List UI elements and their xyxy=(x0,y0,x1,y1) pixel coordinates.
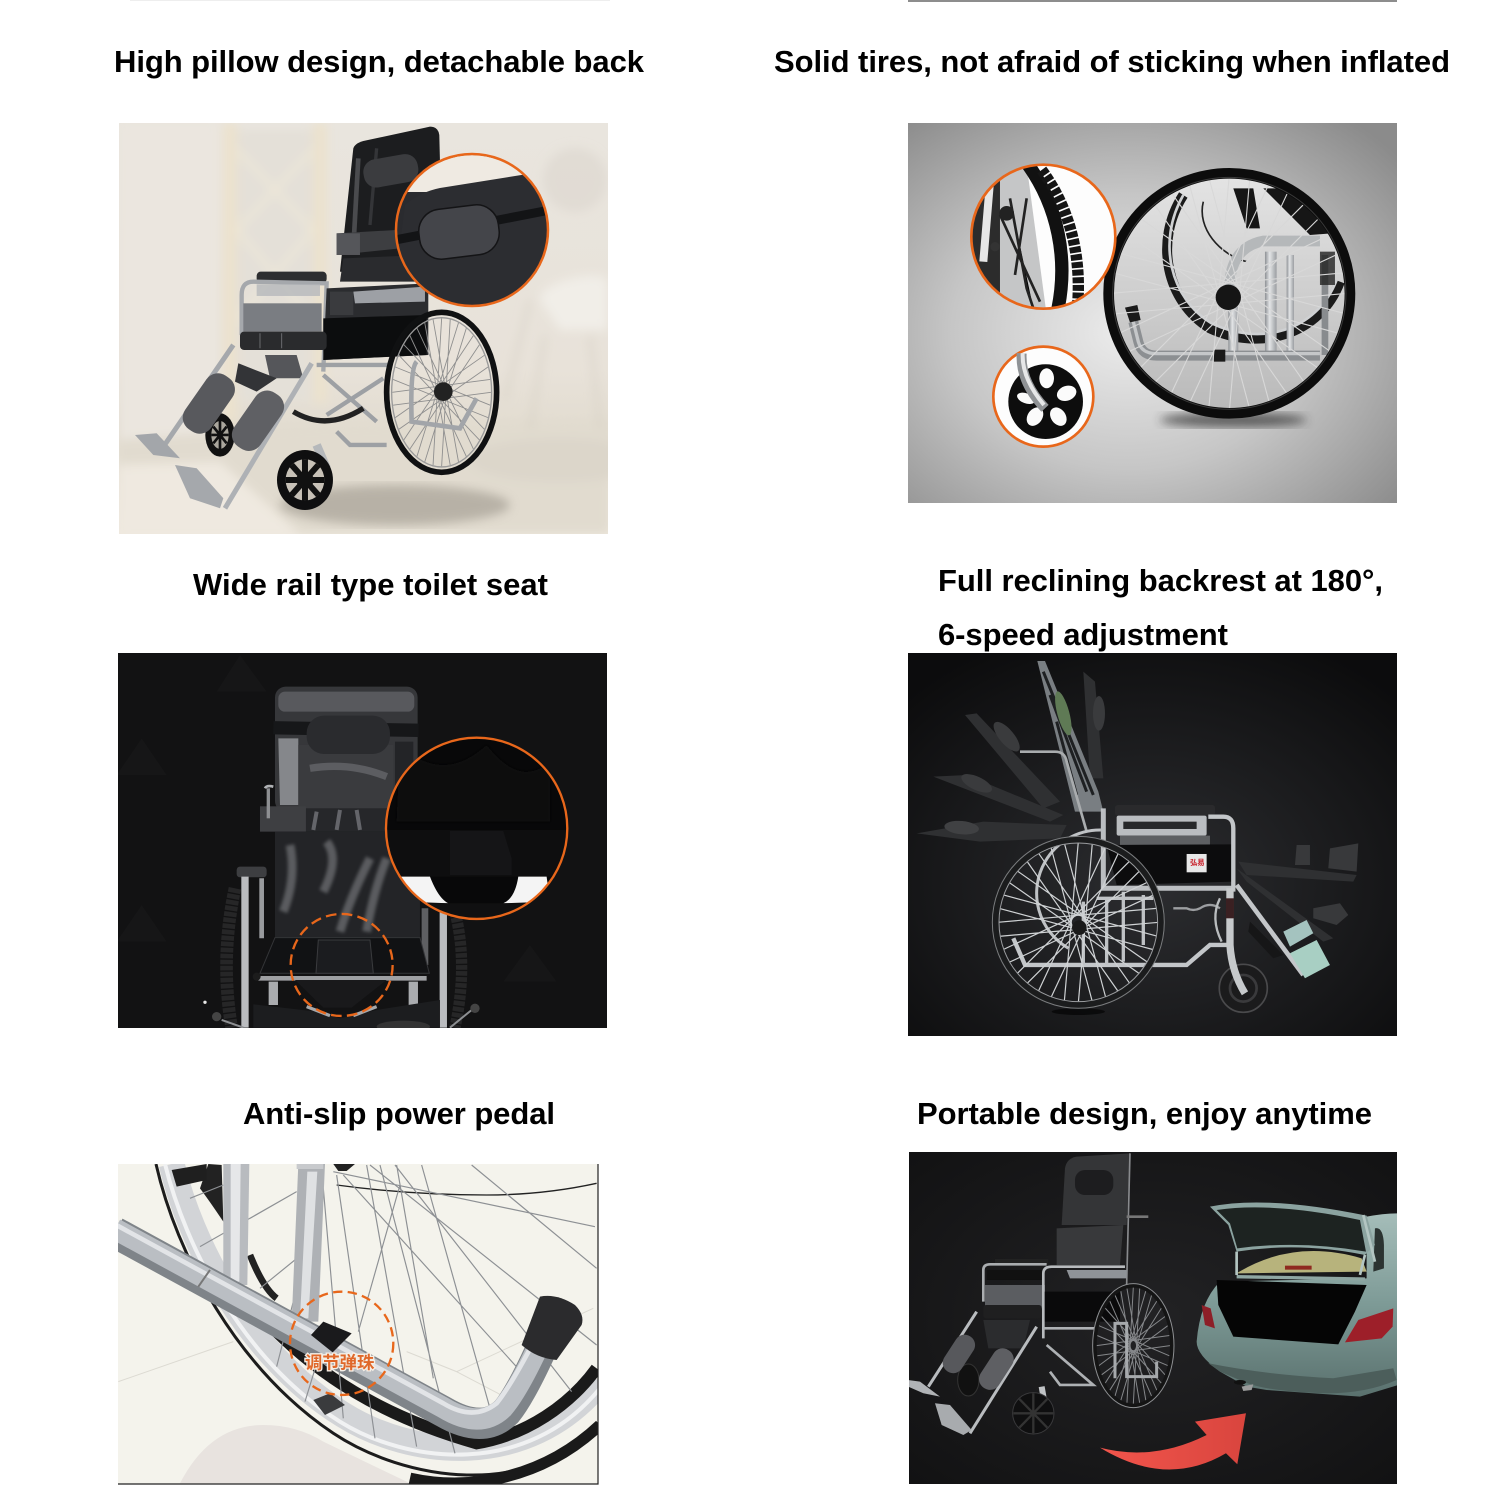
heading: Full reclining backrest at 180°, 6-speed adjustment: Full reclining backrest at 180°, xyxy=(938,563,1383,598)
heading: Solid tires, not afraid of sticking when inflated: Solid tires, not afraid of sticking when inflated xyxy=(774,44,1450,79)
rear wheel xyxy=(1052,1008,1105,1015)
upright transparent backrest xyxy=(1037,661,1103,812)
big wheel xyxy=(392,318,491,466)
panel: reclining backrest photo: 弘易 xyxy=(1190,858,1205,867)
panel: high pillow photo xyxy=(119,123,650,534)
panel: reclining backrest photo xyxy=(908,653,1397,1036)
main wheel xyxy=(1109,173,1353,413)
car xyxy=(1197,1202,1398,1397)
heading: Anti-slip power pedal: Anti-slip power pedal xyxy=(243,1096,555,1131)
floor tiles and reflection xyxy=(118,1183,597,1483)
panel: tires photo xyxy=(908,123,1397,503)
dashed marker xyxy=(290,1292,393,1395)
callout: front caster xyxy=(993,347,1093,447)
callout: pillow close-up xyxy=(394,152,550,308)
vertical tubes xyxy=(223,1162,355,1322)
white speck xyxy=(203,1001,207,1004)
rear casters xyxy=(205,413,235,457)
panel: anti-slip pedal photo xyxy=(115,1162,600,1484)
panel border lines xyxy=(118,1164,598,1484)
panel: toilet seat photo xyxy=(117,653,607,1033)
heading: High pillow design, detachable back: High pillow design, detachable back xyxy=(114,44,645,79)
callout: seat close-up xyxy=(386,738,567,922)
label text: 调节弹珠 xyxy=(305,1352,375,1372)
top edge remnants xyxy=(130,0,1397,2)
backrest upper xyxy=(273,687,419,812)
wheelchair xyxy=(135,127,497,510)
leg rest and pedals xyxy=(1237,885,1303,975)
dashed marker circle xyxy=(291,914,393,1016)
black collar and end cap xyxy=(311,1296,582,1415)
heading: Full reclining backrest at 180°, 6-speed adjustment: 6-speed adjustment xyxy=(938,617,1228,652)
main tube xyxy=(115,1224,540,1423)
curved red arrow xyxy=(1100,1413,1246,1469)
wheel ground shadow xyxy=(1160,413,1307,427)
callout: tire tread xyxy=(970,165,1115,315)
ghosted recline positions xyxy=(917,672,1358,942)
wheelchair xyxy=(908,1153,1174,1435)
heading: Portable design, enjoy anytime: Portable design, enjoy anytime xyxy=(917,1096,1372,1131)
spokes xyxy=(190,1165,597,1453)
heading: Full reclining backrest at 180°, 6-speed adjustment xyxy=(938,563,1383,652)
room background xyxy=(119,123,650,534)
seat cushion xyxy=(253,938,440,1033)
wheel rim xyxy=(156,1164,600,1483)
backrest lower xyxy=(260,806,420,938)
seat and side frame xyxy=(1196,805,1214,814)
heading: Wide rail type toilet seat: Wide rail type toilet seat xyxy=(193,567,548,602)
rear wheels xyxy=(227,888,235,1028)
footplates xyxy=(135,433,180,458)
armrest and frame xyxy=(212,786,480,1028)
front caster xyxy=(277,450,333,510)
panel: portable design photo xyxy=(908,1152,1398,1484)
floor shadow xyxy=(280,485,510,525)
front fork and caster xyxy=(1219,964,1267,1012)
background triangles xyxy=(117,655,557,982)
